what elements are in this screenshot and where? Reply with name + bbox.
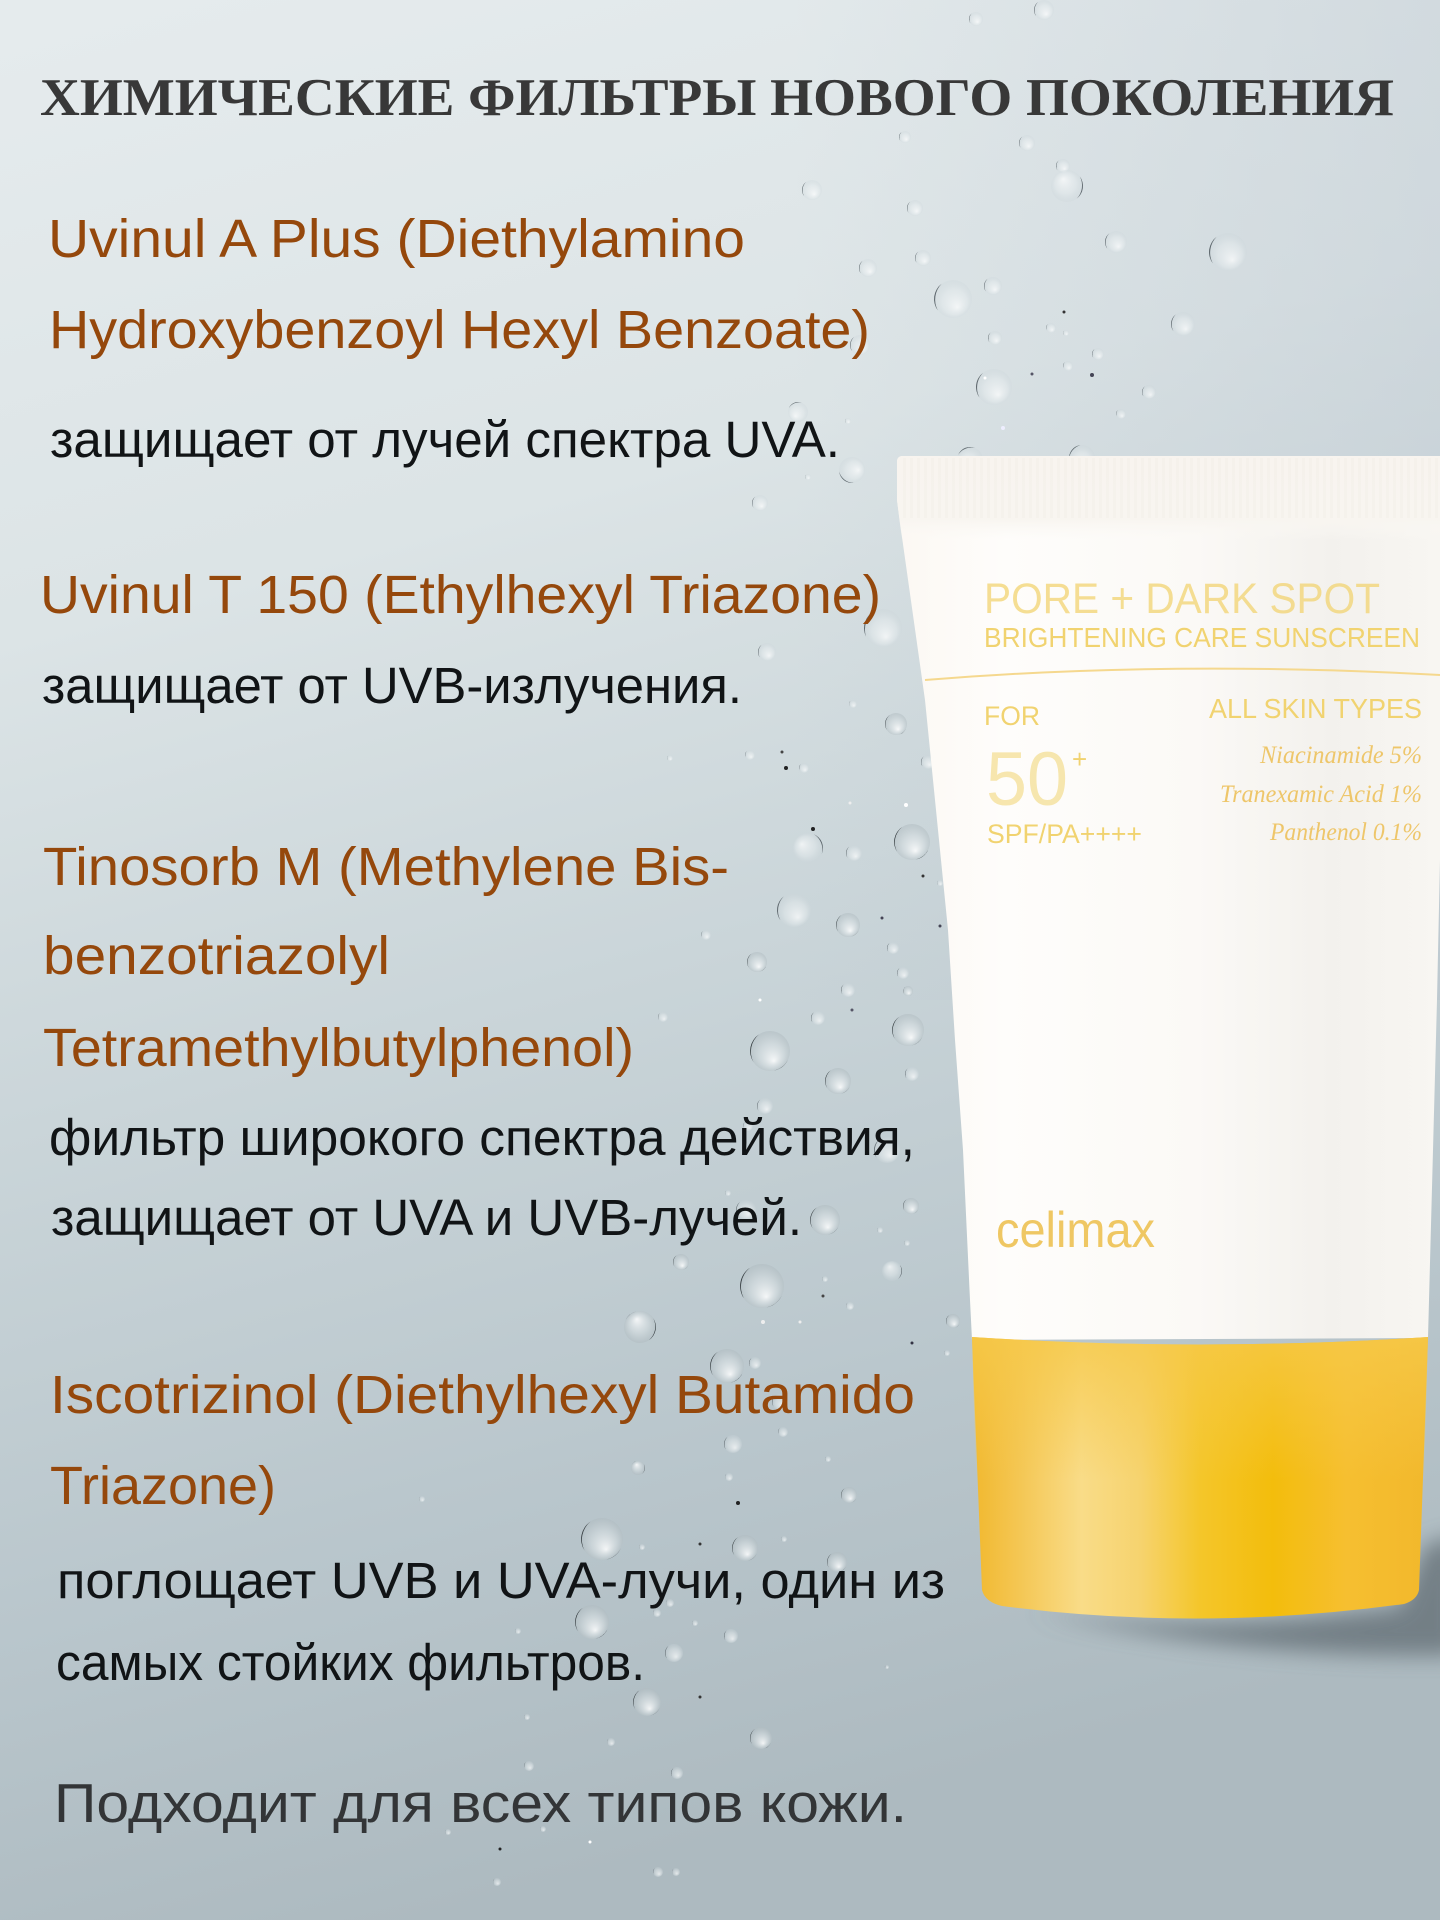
label: PORE + DARK SPOT: PORE + DARK SPOT bbox=[984, 575, 1380, 623]
logo: celimax: celimax bbox=[996, 1202, 1155, 1258]
water droplets bbox=[419, 0, 1247, 1886]
text block: Tinosorb M bbox=[43, 837, 915, 1246]
label: all skin types: ALL SKIN TYPES bbox=[1209, 693, 1422, 724]
text block: Iscotrizinol bbox=[50, 1365, 945, 1691]
ingredient name: Iscotrizinol (Diethylhexyl Butamido bbox=[50, 1365, 915, 1425]
description: защищает от лучей спектра UVA. bbox=[50, 411, 840, 468]
description: поглощает UVB и UVA-лучи, один из bbox=[57, 1552, 945, 1609]
ingredient name: Uvinul A Plus (Diethylamino bbox=[48, 209, 745, 269]
label: niacinamide: Niacinamide 5% bbox=[1259, 742, 1422, 769]
label: panthenol: Panthenol 0.1% bbox=[1269, 819, 1422, 846]
description: защищает от UVB-излучения. bbox=[42, 657, 742, 714]
ingredient name: Uvinul T 150 (Ethylhexyl Triazone) bbox=[40, 565, 881, 625]
ingredient name, second line: Hydroxybenzoyl Hexyl Benzoate) bbox=[49, 300, 870, 360]
tube cap bbox=[972, 1337, 1428, 1619]
tube body bbox=[897, 456, 1440, 1340]
tube crimped collar bbox=[897, 456, 1440, 540]
label: SPF/PA++++: SPF/PA++++ bbox=[987, 819, 1142, 849]
description: фильтр широкого спектра действия, bbox=[49, 1109, 915, 1166]
label: brightening care sunscreen: BRIGHTENING CARE SUNSCREEN bbox=[984, 622, 1420, 653]
tube shadow bbox=[1030, 1535, 1440, 1655]
ingredient name: Tinosorb M (Methylene Bis- bbox=[43, 837, 729, 897]
ingredient name, third line: Tetramethylbutylphenol) bbox=[43, 1018, 634, 1078]
title: ХИМИЧЕСКИЕ ФИЛЬТРЫ НОВОГО ПОКОЛЕНИЯ bbox=[40, 69, 1394, 127]
product: sunscreen tube bbox=[897, 456, 1440, 1619]
label: tranexamic acid: Tranexamic Acid 1% bbox=[1220, 781, 1422, 808]
label: 50+: 50 bbox=[986, 737, 1068, 822]
tube divider line bbox=[925, 669, 1440, 680]
text block: Uvinul T 150 bbox=[40, 565, 881, 714]
ingredient name, second line: benzotriazolyl bbox=[43, 926, 390, 986]
closing statement: Подходит для всех типов кожи. bbox=[54, 1772, 907, 1834]
text block: Uvinul A Plus bbox=[48, 209, 870, 468]
label: for: FOR bbox=[984, 701, 1040, 731]
description, second line: защищает от UVA и UVB-лучей. bbox=[51, 1189, 802, 1246]
label: plus sign: + bbox=[1072, 744, 1087, 774]
ingredient name, second line: Triazone) bbox=[50, 1456, 276, 1516]
description, second line: самых стойких фильтров. bbox=[56, 1634, 645, 1691]
